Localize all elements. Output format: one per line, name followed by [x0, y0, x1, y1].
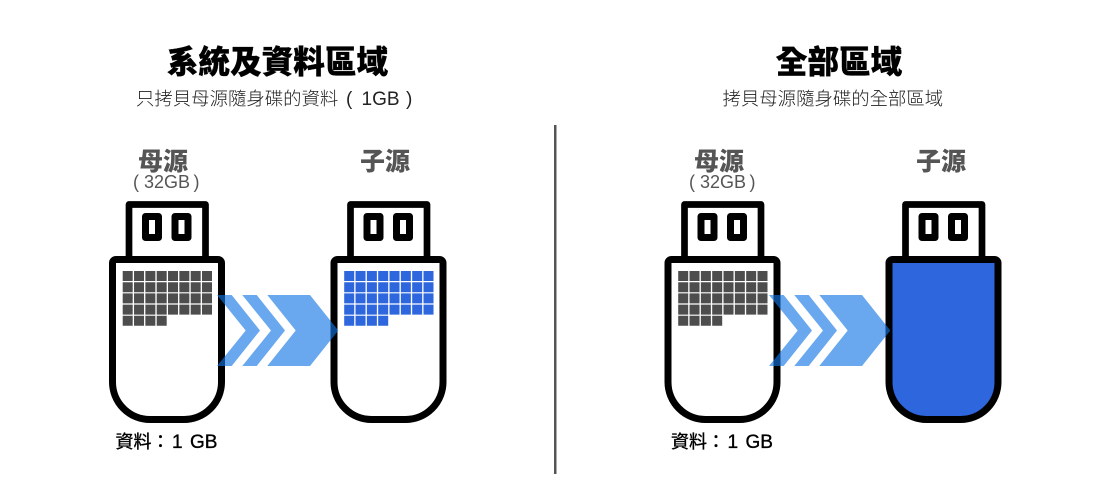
icon: source USB drive	[112, 204, 222, 420]
subtitle: system and data area: (	[346, 89, 353, 110]
label: source capacity: (	[689, 172, 695, 192]
label: target: 子源	[360, 148, 410, 176]
panel: whole area	[668, 44, 998, 453]
label: data size: 1	[172, 432, 183, 453]
arrow: copy direction	[769, 295, 890, 366]
icon: target USB drive full	[889, 204, 998, 420]
panel: system and data area	[112, 44, 443, 453]
title: system and data area: 系統及資料區域	[167, 44, 388, 80]
icon: target USB drive with partial data	[334, 204, 443, 420]
label: source capacity: )	[750, 172, 756, 192]
label: data size: 資料：	[671, 432, 725, 452]
label: source capacity: 32GB	[144, 172, 190, 192]
subtitle: system and data area: 只拷貝母源隨身碟的資料	[136, 88, 338, 109]
label: source: 母源	[694, 148, 744, 176]
subtitle: system and data area: )	[406, 89, 412, 110]
label: data size: 資料：	[116, 432, 170, 452]
data blocks: source	[678, 276, 768, 321]
label: source capacity: (	[133, 172, 139, 192]
label: data size: GB	[190, 432, 217, 453]
subtitle: system and data area: 1GB	[362, 89, 400, 110]
divider	[554, 125, 556, 474]
arrow: copy direction	[217, 295, 338, 366]
label: source: 母源	[138, 148, 188, 176]
icon: source USB drive	[668, 204, 777, 420]
label: data size: GB	[746, 432, 773, 453]
label: data size: 1	[728, 432, 738, 453]
subtitle: whole area: 拷貝母源隨身碟的全部區域	[722, 88, 943, 109]
data blocks: target	[344, 276, 434, 321]
label: source capacity: 32GB	[700, 172, 746, 192]
title: whole area: 全部區域	[776, 44, 903, 80]
data blocks: source	[123, 276, 212, 321]
label: target: 子源	[916, 148, 966, 176]
label: source capacity: )	[194, 172, 200, 192]
